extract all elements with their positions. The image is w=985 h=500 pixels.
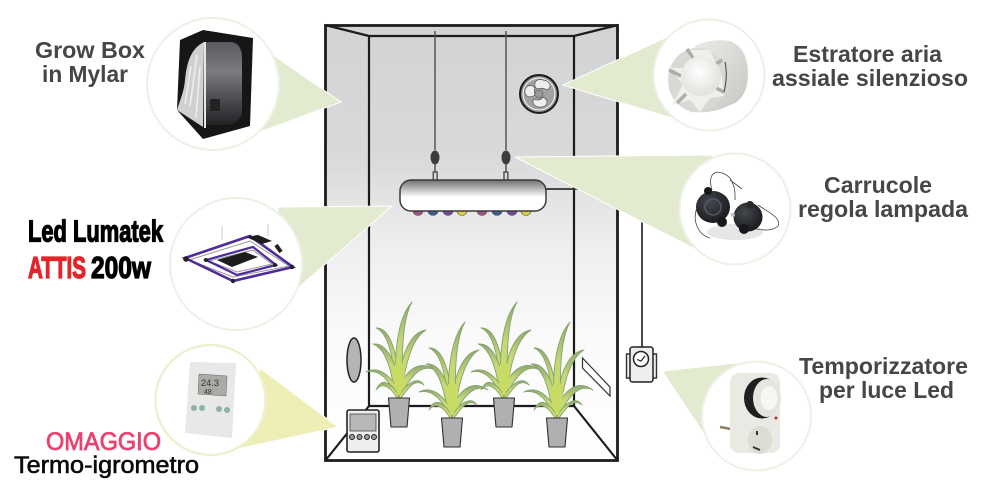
pulleys photo (695, 172, 779, 240)
back wall vent (347, 338, 361, 382)
label: Estratore aria: assiale silenzioso (772, 65, 968, 91)
label: Carrucole (798, 172, 968, 222)
circle: timer (702, 362, 811, 470)
lamp body (400, 180, 546, 211)
label: OMAGGIO Termo-igrometro: Termo-igrometro (14, 452, 199, 479)
plant 2 (419, 322, 488, 447)
label: Temporizzatore: Temporizzatore (799, 353, 968, 379)
tent frame lines (325, 25, 618, 461)
circle: LED (170, 198, 302, 330)
label: OMAGGIO Termo-igrometro: OMAGGIO (46, 428, 161, 456)
LED bulbs (413, 211, 531, 216)
callout cone: grow box (257, 55, 341, 133)
tent diagram (325, 25, 618, 461)
label: Led Lumatek ATTIS 200w: Led Lumatek (28, 214, 164, 248)
label: Temporizzatore: per luce Led (819, 377, 954, 403)
grow tent photo (177, 30, 253, 139)
callout cone: pulleys (515, 155, 713, 250)
circle: grow box (147, 18, 279, 150)
LED Lumatek photo (183, 224, 294, 283)
label: Led Lumatek ATTIS 200w: 200w (91, 250, 152, 285)
power cable (546, 189, 642, 347)
label: OMAGGIO Termo-igrometro (14, 428, 199, 479)
thermometer photo (185, 362, 236, 438)
plant 3 (471, 302, 540, 427)
plant 1 (366, 302, 435, 427)
callout cone: timer (662, 363, 737, 443)
display readings: 24.3 (201, 378, 219, 388)
label: Grow Box: Grow Box (35, 37, 145, 63)
LED lamp with cables (400, 31, 642, 347)
right wall vent (582, 358, 610, 396)
circle: extractor (654, 20, 764, 130)
label: Led Lumatek ATTIS 200w: ATTIS (28, 250, 86, 285)
label: Carrucole: Carrucole (824, 172, 932, 198)
plants (366, 302, 593, 447)
label: Temporizzatore (799, 353, 968, 403)
callout cone: thermo-hygrometer (233, 368, 338, 450)
tent walls background (325, 25, 618, 461)
circle: pulleys (680, 154, 790, 264)
axial fan photo (668, 40, 748, 112)
callout cone: LED (277, 206, 392, 288)
hanging wires and pulleys (430, 31, 510, 181)
timer plug photo (720, 373, 781, 454)
plant 4 (524, 322, 593, 447)
circle: thermo-hygrometer (156, 345, 266, 455)
label: Estratore aria: Estratore aria (793, 41, 942, 67)
extractor fan on wall (520, 75, 558, 113)
label: Grow Box: in Mylar (42, 61, 128, 87)
thermo-hygrometer device (347, 410, 379, 452)
label: Grow Box (35, 37, 145, 87)
timer device (626, 347, 656, 382)
label: Estratore aria (772, 41, 968, 91)
callout cone: extractor (563, 37, 672, 118)
label: Carrucole: regola lampada (798, 196, 968, 222)
thermometer photo: 48 (204, 389, 212, 396)
label: Led Lumatek ATTIS 200w (28, 214, 164, 285)
